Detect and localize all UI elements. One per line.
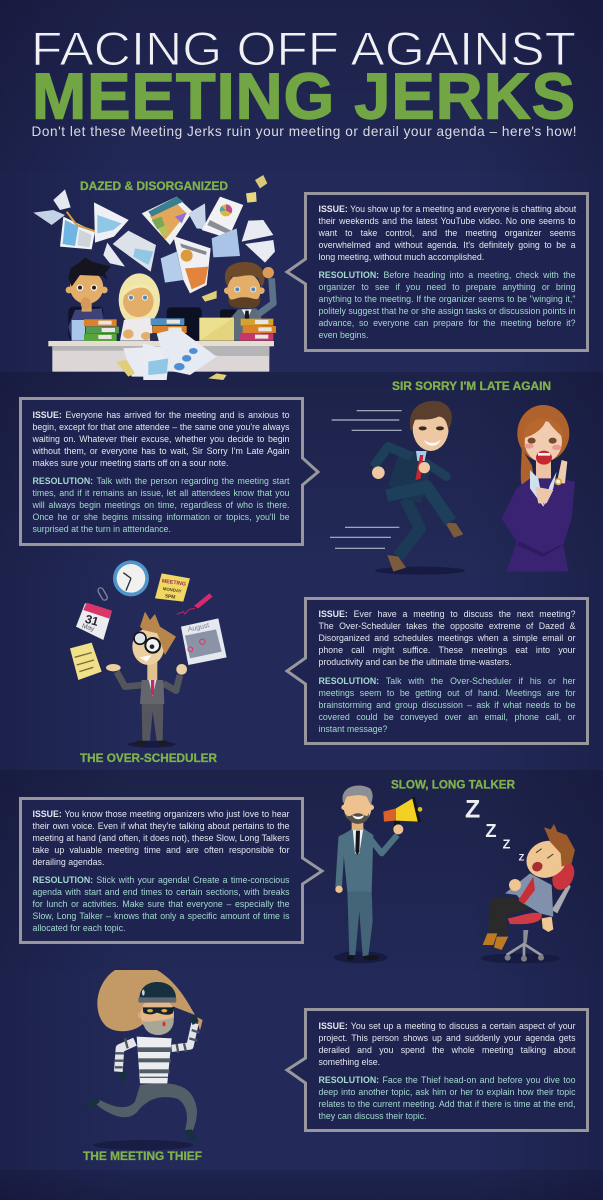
resolution text: meetings seem to be getting out of hand. Meetings are for <box>318 688 576 698</box>
issue text <box>318 1021 576 1067</box>
resolution text: surprised at the turn in atttendance. <box>32 524 171 534</box>
panel: dazed and disorganized <box>34 175 589 380</box>
resolution text: deep into another topic, ask him or her to explain how their topic <box>318 1087 576 1097</box>
heading: SIR SORRY I'M LATE AGAIN <box>392 379 551 393</box>
issue text: derailing agendas. <box>32 857 104 867</box>
issue text: long meeting, without much accomplished. <box>318 252 484 262</box>
issue text: something else. <box>318 1057 380 1067</box>
resolution text: organizer to see if you need to prepare anything or bring <box>318 282 576 292</box>
issue text: their weekends and the latest YouTube video. No one seems to <box>318 216 576 226</box>
resolution text: even begins. <box>318 330 368 340</box>
resolution text: RESOLUTION: Before heading into a meeting, check with the <box>318 270 576 280</box>
resolution text <box>318 270 576 340</box>
illustration: man with megaphone and sleeping coworker: Z <box>485 820 497 841</box>
resolution text: will always begin meetings on time, regardless of who is there. <box>32 500 290 510</box>
title <box>31 23 576 139</box>
illustration: man with megaphone and sleeping coworker: Z <box>519 852 525 862</box>
resolution text: instant message? <box>318 724 387 734</box>
speech box frame <box>20 798 322 942</box>
heading: SLOW, LONG TALKER <box>391 778 515 792</box>
issue text <box>318 609 576 667</box>
illustration: flying papers and three workers at desk <box>33 175 276 380</box>
panel: the over-scheduler <box>70 560 589 765</box>
resolution text <box>318 1075 576 1121</box>
issue text: their own voice. Even if what they're talking about pertains to the <box>32 821 290 831</box>
issue text: Disorganized and schedules meetings when a simple email or <box>318 633 576 643</box>
issue text: take up valuable meeting time and are often responsible for <box>32 845 290 855</box>
illustration: man juggling clock, calendar and notes: MEETING <box>161 578 186 588</box>
issue text: ISSUE: You show up for a meeting and everyone is chatting about <box>318 204 576 214</box>
speech box frame <box>20 398 318 544</box>
speech box frame <box>287 598 588 744</box>
resolution text: RESOLUTION: Talk with the Over-Scheduler if his or her <box>318 676 576 686</box>
resolution text: agenda with start and end times to certain sections, with breaks <box>32 887 290 897</box>
illustration: man juggling clock, calendar and notes: 31 <box>84 612 100 629</box>
issue text <box>32 809 290 867</box>
speech box frame <box>287 1010 588 1130</box>
panel: the meeting thief <box>82 970 589 1163</box>
issue text <box>318 204 576 262</box>
illustration: man juggling clock, calendar and notes: May <box>81 623 96 633</box>
panel: slow, long talker <box>19 778 575 964</box>
illustration: man juggling clock, calendar and notes: August <box>187 622 210 634</box>
resolution text: for lunch or activities. Make sure that everyone – especially the <box>32 899 290 909</box>
illustration: man with megaphone and sleeping coworker: Z <box>465 796 480 824</box>
issue text: makes sure your meeting starts off on a sour note. <box>32 458 228 468</box>
resolution text: anything to the meeting. If the organizer seems to be "winging it," <box>318 294 576 304</box>
issue text <box>32 410 290 468</box>
issue text: ISSUE: You know those meeting organizers who just love to hear <box>32 809 290 819</box>
issue text: phone call might suffice. These meetings eat into your <box>318 645 576 655</box>
issue text: project. This person shows up and suddenly your agenda gets <box>318 1033 576 1043</box>
resolution text: politely suggest that he or she assign tasks or discussion points in <box>318 306 576 316</box>
resolution text <box>318 676 576 734</box>
resolution text: allocated for each topic. <box>32 923 125 933</box>
resolution text: times, and if it remains an issue, let all attendees know that you <box>32 488 290 498</box>
illustration: man with megaphone and sleeping coworker <box>334 785 579 963</box>
issue text: overwhelmed and without agenda. It's definitely going to be a <box>318 240 576 250</box>
speech box frame <box>287 194 588 350</box>
resolution text: RESOLUTION: Stick with your agenda! Create a time-conscious <box>32 875 290 885</box>
illustration: man juggling clock, calendar and notes: MONDAY <box>163 586 182 594</box>
resolution text <box>32 476 290 534</box>
heading: DAZED & DISORGANIZED <box>80 179 228 193</box>
resolution text: they can discuss their topic. <box>318 1111 427 1121</box>
issue text: without them, or everyone has to wait, Sir Sorry I'm Late Again <box>32 446 290 456</box>
illustration: thief running with sack <box>82 970 203 1150</box>
issue text: derailed and you spend the whole meeting talking about <box>318 1045 576 1055</box>
issue text: want to take control, and the meeting organizer seems <box>318 228 576 238</box>
issue text: The Over-Scheduler takes the opposite extreme of Dazed & <box>318 621 576 631</box>
issue text: meeting at hand (and often, it does not), these Slow, Long Talkers <box>32 833 290 843</box>
resolution text: Slow, Long Talker – knows that only a specific amount of time is <box>32 911 290 921</box>
resolution text: advance, so everyone can prepare for the meeting before it? <box>318 318 576 328</box>
resolution text <box>32 875 290 933</box>
illustration: man juggling clock, calendar and notes <box>70 560 227 748</box>
title line: facing off against: FACING OFF AGAINST <box>31 23 576 76</box>
issue text: begin, except for that one attendee – the same one you're always <box>32 422 290 432</box>
resolution text: RESOLUTION: Talk with the person regarding the meeting start <box>32 476 290 486</box>
resolution text: Once he or she begins missing information or topics, you'll be <box>32 512 290 522</box>
heading: THE MEETING THIEF <box>83 1149 202 1163</box>
resolution text: brainstorming and group discussion – ask if what needs to be <box>318 700 576 710</box>
issue text: ISSUE: Everyone has arrived for the meeting and is anxious to <box>32 410 290 420</box>
subtitle: Don't let these Meeting Jerks ruin your meeting or derail your agenda – here's how! <box>32 124 576 139</box>
issue text: waiting on. Whatever their excuse, whether you decide to begin <box>32 434 290 444</box>
issue text: ISSUE: Ever have a meeting to discuss the next meeting? <box>318 609 576 619</box>
issue text: productivity and can be the ultimate time-wasters. <box>318 657 512 667</box>
issue text: ISSUE: You set up a meeting to discuss a certain aspect of your <box>318 1021 576 1031</box>
illustration: late man running past angry woman <box>330 401 575 575</box>
heading: THE OVER-SCHEDULER <box>80 751 217 765</box>
title line: meeting jerks: MEETING JERKS <box>32 60 575 133</box>
resolution text: relates to the current meeting. Add that if there is time at the end, <box>318 1099 576 1109</box>
illustration: man juggling clock, calendar and notes: 5PM <box>165 593 176 601</box>
panel: sir sorry i'm late again <box>19 379 575 574</box>
resolution text: RESOLUTION: Face the Thief head-on and before you dive too <box>318 1075 576 1085</box>
resolution text: covered could be conveyed over an email, phone call, or <box>318 712 576 722</box>
illustration: man with megaphone and sleeping coworker: Z <box>503 838 511 852</box>
